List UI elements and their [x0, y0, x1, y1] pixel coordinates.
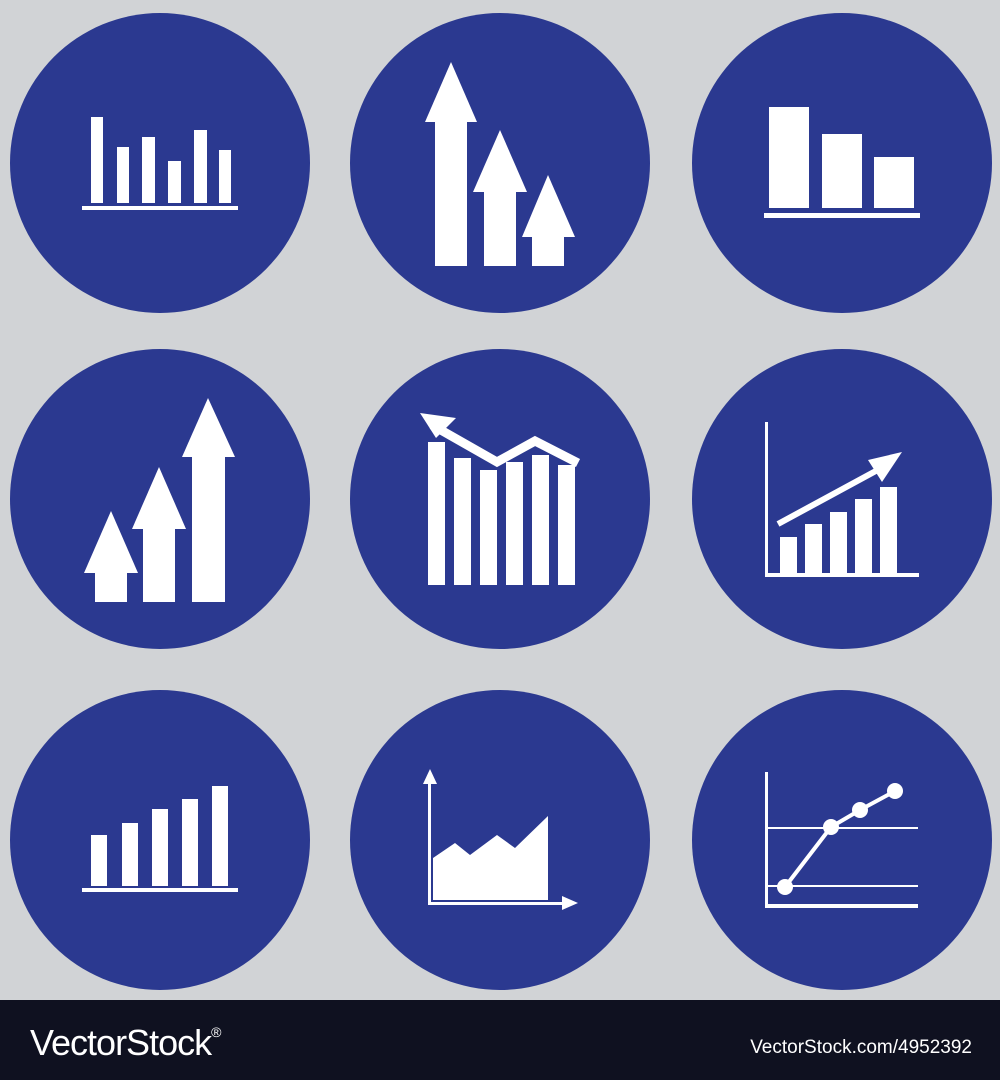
icon: three arrows descending: [350, 13, 650, 313]
icon: declining bars: [692, 13, 992, 313]
icon: bar chart: [10, 13, 310, 313]
icon: line chart with dots: [692, 690, 992, 990]
icon: rising bars: [10, 690, 310, 990]
icon: area chart: [350, 690, 650, 990]
icon: three arrows ascending: [10, 349, 310, 649]
footer bar: [0, 1000, 1000, 1080]
icon: bars with trend arrow: [350, 349, 650, 649]
footer url: VectorStock.com/4952392: [750, 1037, 972, 1058]
footer logo: VectorStock: [30, 1022, 211, 1063]
icon: growth chart with arrow: [692, 349, 992, 649]
footer logo: ®: [211, 1024, 222, 1040]
